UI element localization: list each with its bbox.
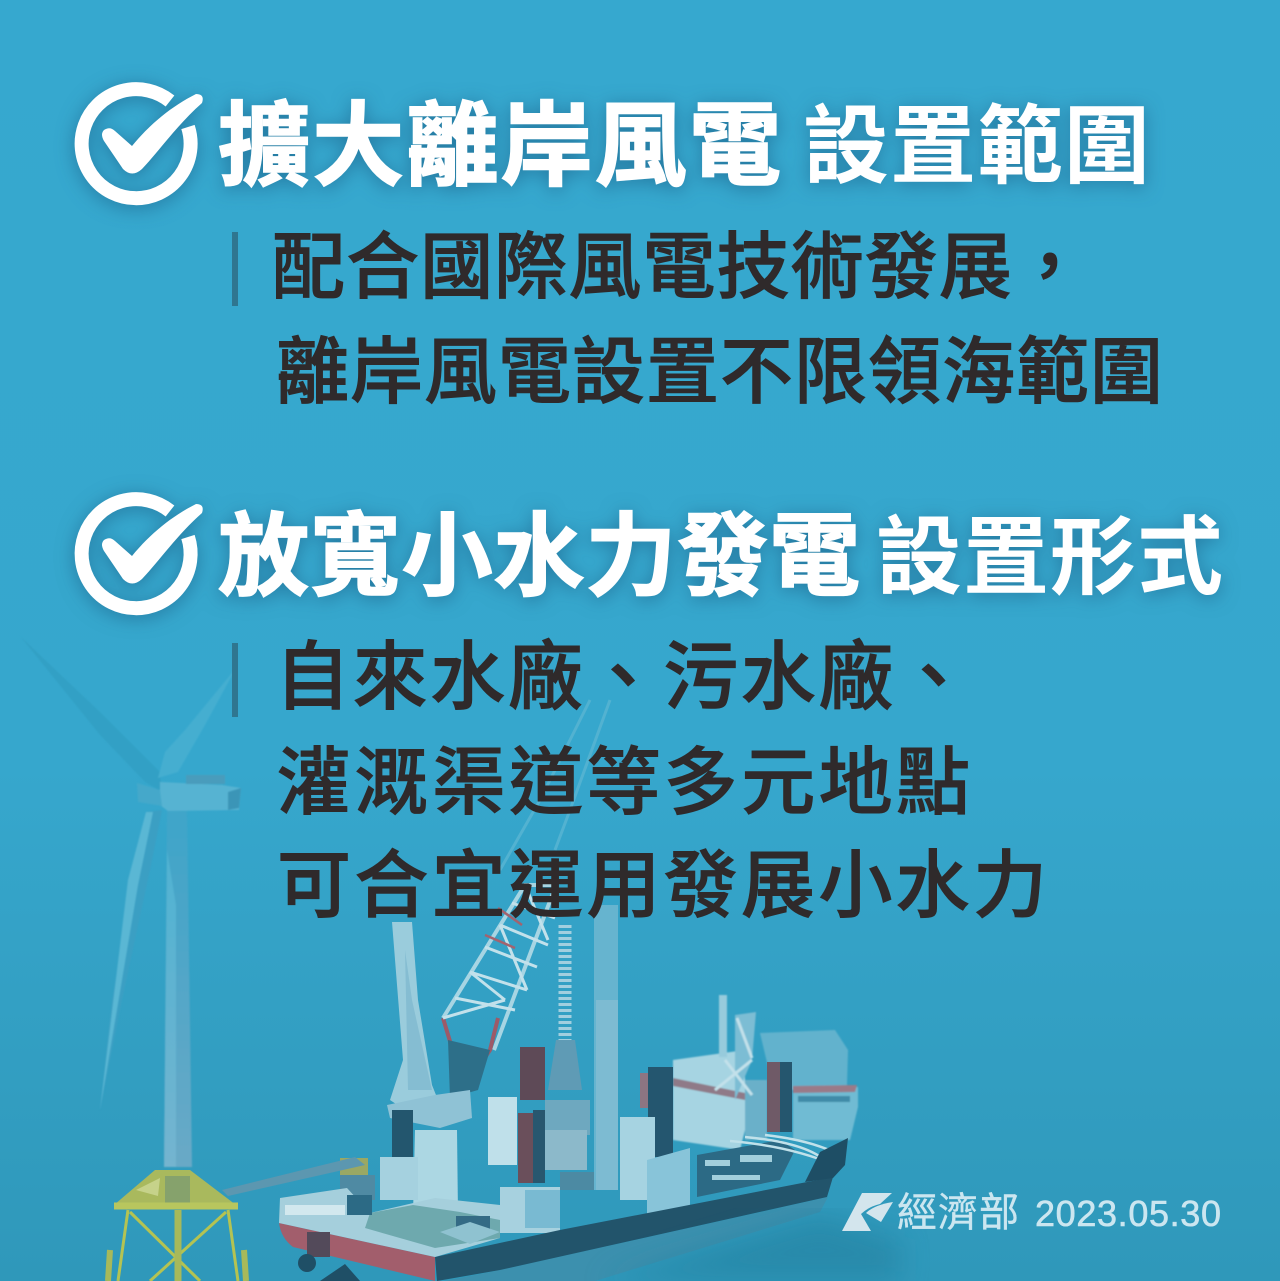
section 2 divider bar (232, 643, 238, 717)
section 1 body text: 離岸風電設置不限領海範圍 (276, 332, 1163, 413)
icon: check mark in circle (82, 89, 203, 198)
section 2 body text: 自來水廠、污水廠、 (275, 635, 971, 719)
section 1 heading (82, 89, 1150, 198)
ship hull reflection (600, 1215, 900, 1281)
ship crane and lattice boom (340, 700, 610, 1215)
jacket foundation (108, 1170, 246, 1281)
date: 2023.05.30 (1035, 1193, 1221, 1234)
section 2 body text: 可合宜運用發展小水力 (277, 844, 1047, 927)
ship distant vessel (673, 995, 858, 1150)
section 2 heading (82, 499, 1223, 608)
section 2 body text (275, 635, 1047, 927)
heading text: 放寬小水力發電 (218, 507, 860, 608)
section 2 body text: 灌溉渠道等多元地點 (277, 741, 970, 824)
heading suffix: 設置範圍 (803, 99, 1150, 195)
wind turbine (20, 636, 241, 1167)
heading text: 擴大離岸風電 (218, 96, 781, 198)
section 1 divider bar (232, 232, 238, 306)
ship jack-up legs and blocks (222, 905, 838, 1233)
section 1 body text: 配合國際風電技術發展， (272, 227, 1086, 308)
ship hull (279, 1138, 848, 1281)
icon: check mark in circle (82, 499, 203, 608)
footer: ministry logo, name and date (842, 1191, 1221, 1235)
icon: ministry logo (842, 1193, 893, 1231)
heading suffix: 設置形式 (876, 510, 1223, 606)
section 1 body text (272, 227, 1163, 413)
ministry name: 經濟部 (897, 1191, 1019, 1235)
